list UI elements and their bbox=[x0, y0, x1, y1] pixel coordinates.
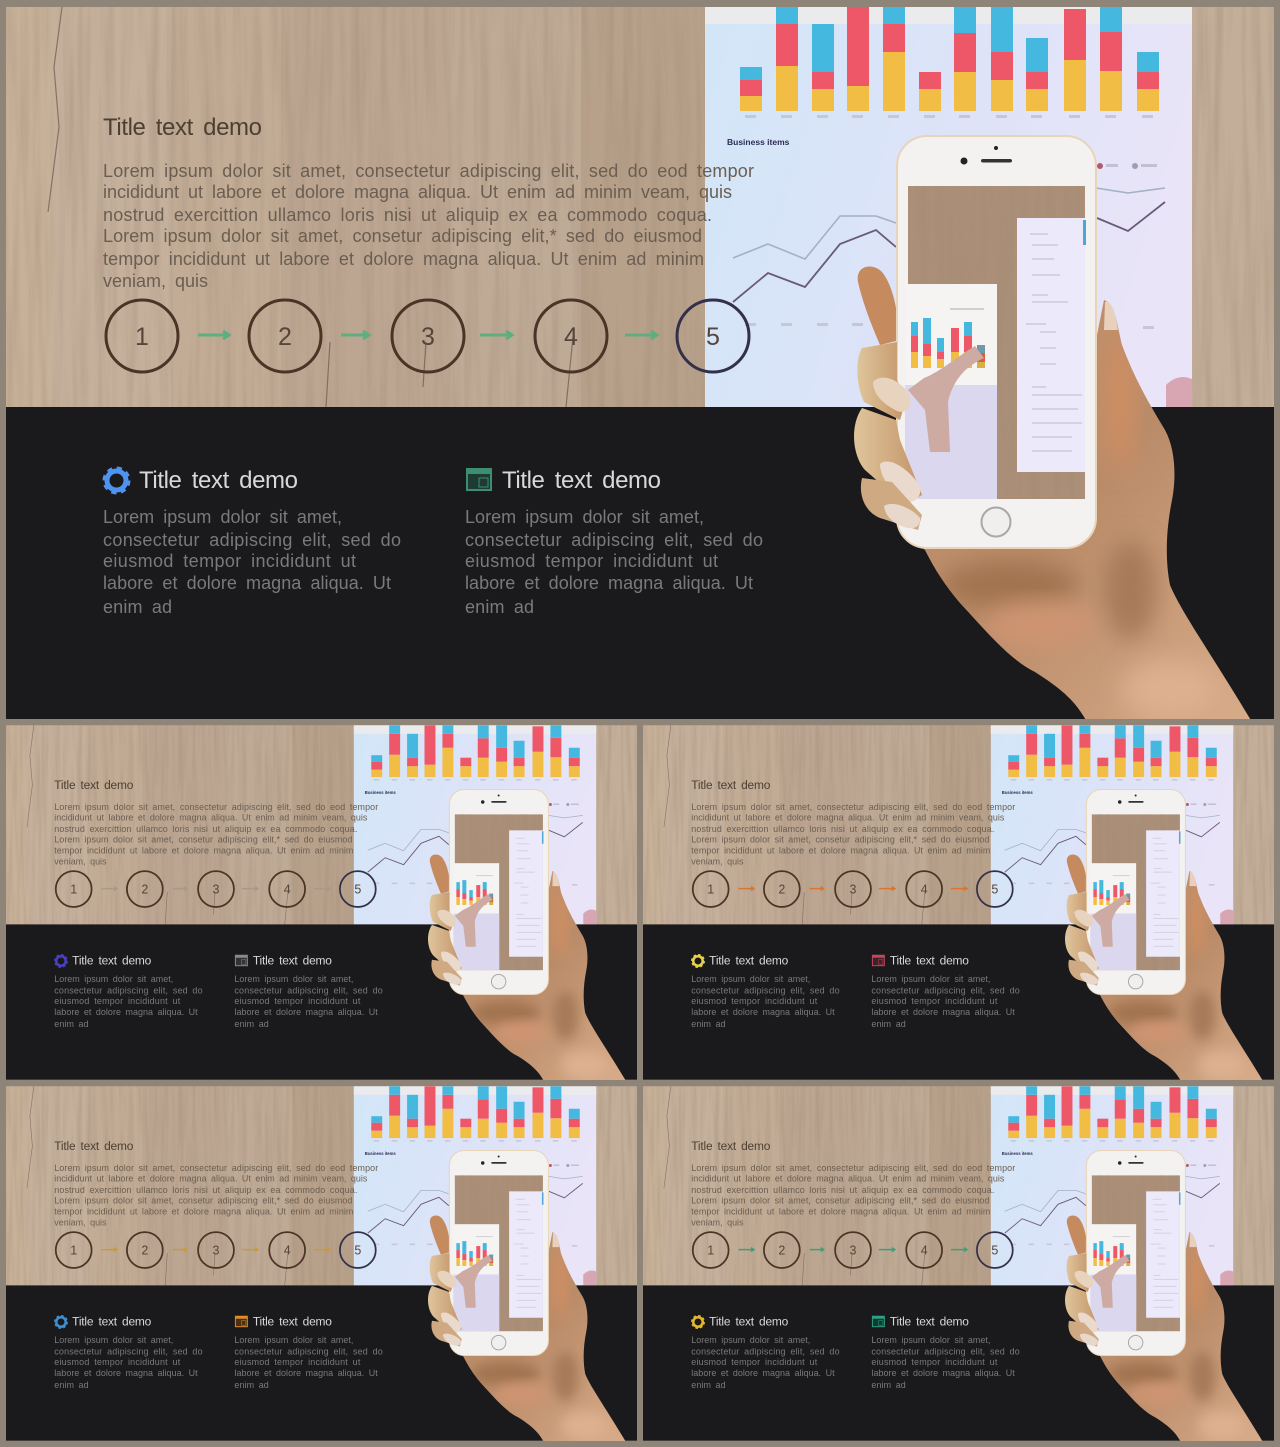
feature text 1: labore et dolore magna aliqua. Ut bbox=[54, 1007, 198, 1017]
text block: intro paragraph: Lorem ipsum dolor sit amet, consetur adipiscing elit,* sed do eiusmod bbox=[691, 1195, 989, 1205]
hand holding phone bbox=[428, 1151, 626, 1442]
feature text 1: Lorem ipsum dolor sit amet, bbox=[691, 974, 810, 984]
feature text 1: consectetur adipiscing elit, sed do bbox=[691, 1347, 840, 1357]
feature title 2: Title text demo bbox=[253, 1315, 332, 1329]
feature title 1: Title text demo bbox=[72, 1315, 152, 1329]
feature text 2: labore et dolore magna aliqua. Ut bbox=[465, 573, 753, 593]
text block: intro paragraph: tempor incididunt ut labore et dolore magna aliqua. Ut enim ad minim bbox=[54, 846, 353, 856]
icon: gear bbox=[55, 955, 67, 967]
feature text 2: labore et dolore magna aliqua. Ut bbox=[871, 1368, 1015, 1378]
numbered process steps: 2 bbox=[278, 323, 292, 351]
text block: intro paragraph: tempor incididunt ut labore et dolore magna aliqua. Ut enim ad minim bbox=[54, 1207, 353, 1217]
feature text 1: enim ad bbox=[691, 1019, 726, 1029]
numbered process steps: 5 bbox=[991, 883, 998, 897]
text block: intro paragraph: nostrud exercittion ullamco loris nisi ut aliquip ex ea commodo coqua. bbox=[691, 1185, 994, 1195]
numbered process steps bbox=[56, 1232, 376, 1268]
text block: intro paragraph: nostrud exercittion ullamco loris nisi ut aliquip ex ea commodo coqua. bbox=[54, 1185, 357, 1195]
heading: Title text demo bbox=[103, 114, 262, 141]
feature title 1: Title text demo bbox=[709, 1315, 789, 1329]
feature text 2: consectetur adipiscing elit, sed do bbox=[465, 530, 763, 550]
text block: intro paragraph: Lorem ipsum dolor sit amet, consetur adipiscing elit,* sed do eiusmod bbox=[54, 834, 352, 844]
panel: dark lower section bbox=[6, 407, 1274, 719]
feature text 1: consectetur adipiscing elit, sed do bbox=[103, 530, 401, 550]
feature title 1: Title text demo bbox=[72, 954, 152, 968]
icon: gear bbox=[692, 955, 704, 967]
feature title 2: Title text demo bbox=[890, 1315, 969, 1329]
hand holding phone bbox=[1065, 1151, 1263, 1442]
text block: intro paragraph bbox=[54, 1163, 378, 1228]
feature text 2: labore et dolore magna aliqua. Ut bbox=[234, 1368, 378, 1378]
feature text 1: eiusmod tempor incididunt ut bbox=[691, 1357, 818, 1367]
heading: Title text demo bbox=[54, 1139, 134, 1153]
feature text 1 bbox=[54, 1335, 203, 1390]
feature text 2 bbox=[871, 1335, 1020, 1390]
feature text 2: enim ad bbox=[465, 597, 534, 617]
icon: window bbox=[235, 1316, 247, 1327]
numbered process steps: 3 bbox=[850, 883, 857, 897]
feature text 2: eiusmod tempor incididunt ut bbox=[871, 1357, 998, 1367]
panel: dark lower section bbox=[6, 924, 637, 1080]
numbered process steps: 2 bbox=[778, 1244, 785, 1258]
feature text 2: eiusmod tempor incididunt ut bbox=[234, 996, 361, 1006]
text block: intro paragraph: nostrud exercittion ullamco loris nisi ut aliquip ex ea commodo coqua. bbox=[54, 824, 357, 834]
panel: main slide bbox=[6, 7, 1274, 719]
numbered process steps: 4 bbox=[284, 883, 291, 897]
text block: intro paragraph: incididunt ut labore et dolore magna aliqua. Ut enim ad minim veam, quis bbox=[691, 1173, 1005, 1183]
panel: variant slide top right bbox=[643, 725, 1274, 1080]
panel: variant slide bottom right bbox=[643, 1086, 1274, 1441]
feature text 2: labore et dolore magna aliqua. Ut bbox=[234, 1007, 378, 1017]
feature title 1: Title text demo bbox=[139, 467, 298, 494]
feature text 1: consectetur adipiscing elit, sed do bbox=[54, 1347, 203, 1357]
icon: window bbox=[872, 955, 884, 966]
icon: gear bbox=[104, 468, 128, 492]
text block: intro paragraph: veniam, quis bbox=[691, 857, 744, 867]
numbered process steps: 3 bbox=[850, 1244, 857, 1258]
feature text 1 bbox=[691, 1335, 840, 1390]
feature text 1 bbox=[54, 974, 203, 1029]
text block: intro paragraph bbox=[691, 1163, 1015, 1228]
numbered process steps: 4 bbox=[921, 1244, 928, 1258]
feature text 1 bbox=[103, 507, 401, 617]
feature text 2: Lorem ipsum dolor sit amet, bbox=[234, 1335, 353, 1345]
feature text 1: enim ad bbox=[54, 1380, 89, 1390]
numbered process steps: 5 bbox=[354, 883, 361, 897]
feature text 1: enim ad bbox=[691, 1380, 726, 1390]
text block: intro paragraph: veniam, quis bbox=[691, 1218, 744, 1228]
numbered process steps: 1 bbox=[70, 1244, 77, 1258]
text block: intro paragraph: veniam, quis bbox=[54, 857, 107, 867]
text block: intro paragraph: incididunt ut labore et dolore magna aliqua. Ut enim ad minim veam, quis bbox=[103, 182, 732, 202]
hand holding phone bbox=[854, 136, 1252, 722]
heading: Title text demo bbox=[691, 778, 771, 792]
feature text 2 bbox=[871, 974, 1020, 1029]
numbered process steps: 4 bbox=[564, 323, 578, 351]
text block: intro paragraph: veniam, quis bbox=[54, 1218, 107, 1228]
text block: intro paragraph: Lorem ipsum dolor sit amet, consectetur adipiscing elit, sed do eod tempor bbox=[103, 161, 754, 181]
text block: intro paragraph: Lorem ipsum dolor sit amet, consetur adipiscing elit,* sed do eiusmod bbox=[54, 1195, 352, 1205]
feature text 2 bbox=[465, 507, 763, 617]
feature text 2: Lorem ipsum dolor sit amet, bbox=[871, 974, 990, 984]
text block: intro paragraph: tempor incididunt ut labore et dolore magna aliqua. Ut enim ad minim bbox=[691, 1207, 990, 1217]
icon: window bbox=[467, 469, 491, 490]
feature text 1: consectetur adipiscing elit, sed do bbox=[691, 986, 840, 996]
feature text 2: consectetur adipiscing elit, sed do bbox=[871, 986, 1020, 996]
feature text 2: enim ad bbox=[234, 1019, 269, 1029]
heading: Title text demo bbox=[691, 1139, 771, 1153]
feature text 2: enim ad bbox=[871, 1019, 906, 1029]
text block: intro paragraph: tempor incididunt ut labore et dolore magna aliqua. Ut enim ad minim bbox=[103, 249, 704, 269]
icon: window bbox=[235, 955, 247, 966]
numbered process steps bbox=[693, 871, 1013, 907]
feature text 2: Lorem ipsum dolor sit amet, bbox=[465, 507, 704, 527]
numbered process steps: 1 bbox=[707, 883, 714, 897]
text block: intro paragraph bbox=[103, 161, 754, 291]
wood background and printed chart paper bbox=[643, 1086, 1274, 1285]
icon: gear bbox=[692, 1316, 704, 1328]
text block: intro paragraph: Lorem ipsum dolor sit amet, consectetur adipiscing elit, sed do eod tempor bbox=[54, 1163, 378, 1173]
feature text 1: Lorem ipsum dolor sit amet, bbox=[103, 507, 342, 527]
wood background and printed chart paper bbox=[6, 1086, 637, 1285]
feature text 1: Lorem ipsum dolor sit amet, bbox=[691, 1335, 810, 1345]
numbered process steps: 3 bbox=[213, 883, 220, 897]
feature text 2: Lorem ipsum dolor sit amet, bbox=[234, 974, 353, 984]
feature text 1: Lorem ipsum dolor sit amet, bbox=[54, 974, 173, 984]
text block: intro paragraph: nostrud exercittion ullamco loris nisi ut aliquip ex ea commodo coqua. bbox=[691, 824, 994, 834]
numbered process steps bbox=[693, 1232, 1013, 1268]
wood background and printed chart paper bbox=[6, 7, 1274, 407]
text block: intro paragraph: Lorem ipsum dolor sit amet, consectetur adipiscing elit, sed do eod tempor bbox=[691, 802, 1015, 812]
feature text 2: eiusmod tempor incididunt ut bbox=[871, 996, 998, 1006]
numbered process steps: 1 bbox=[707, 1244, 714, 1258]
feature text 1: consectetur adipiscing elit, sed do bbox=[54, 986, 203, 996]
numbered process steps: 2 bbox=[141, 1244, 148, 1258]
numbered process steps: 5 bbox=[354, 1244, 361, 1258]
feature text 1: labore et dolore magna aliqua. Ut bbox=[691, 1007, 835, 1017]
feature text 2 bbox=[234, 1335, 383, 1390]
numbered process steps: 2 bbox=[141, 883, 148, 897]
feature text 1 bbox=[691, 974, 840, 1029]
feature text 1: eiusmod tempor incididunt ut bbox=[54, 1357, 181, 1367]
text block: intro paragraph bbox=[54, 802, 378, 867]
icon: gear bbox=[55, 1316, 67, 1328]
numbered process steps bbox=[106, 300, 749, 372]
text block: intro paragraph: nostrud exercittion ullamco loris nisi ut aliquip ex ea commodo coqua. bbox=[103, 205, 712, 225]
numbered process steps: 1 bbox=[135, 323, 149, 351]
text block: intro paragraph: Lorem ipsum dolor sit amet, consectetur adipiscing elit, sed do eod tempor bbox=[691, 1163, 1015, 1173]
feature text 1: eiusmod tempor incididunt ut bbox=[54, 996, 181, 1006]
feature text 2: consectetur adipiscing elit, sed do bbox=[234, 1347, 383, 1357]
text block: intro paragraph: incididunt ut labore et dolore magna aliqua. Ut enim ad minim veam, quis bbox=[54, 1173, 368, 1183]
panel: dark lower section bbox=[6, 1285, 637, 1441]
feature text 1: labore et dolore magna aliqua. Ut bbox=[691, 1368, 835, 1378]
feature text 1: labore et dolore magna aliqua. Ut bbox=[103, 573, 391, 593]
numbered process steps: 5 bbox=[706, 323, 720, 351]
panel: dark lower section bbox=[643, 1285, 1274, 1441]
feature text 2: eiusmod tempor incididunt ut bbox=[234, 1357, 361, 1367]
text block: intro paragraph: incididunt ut labore et dolore magna aliqua. Ut enim ad minim veam, quis bbox=[54, 812, 368, 822]
feature text 1: eiusmod tempor incididunt ut bbox=[103, 551, 356, 571]
feature text 2: consectetur adipiscing elit, sed do bbox=[234, 986, 383, 996]
feature text 2: Lorem ipsum dolor sit amet, bbox=[871, 1335, 990, 1345]
feature text 1: eiusmod tempor incididunt ut bbox=[691, 996, 818, 1006]
feature title 2: Title text demo bbox=[890, 954, 969, 968]
icon: window bbox=[872, 1316, 884, 1327]
feature title 1: Title text demo bbox=[709, 954, 789, 968]
heading: Title text demo bbox=[54, 778, 134, 792]
text block: intro paragraph bbox=[691, 802, 1015, 867]
feature text 2: consectetur adipiscing elit, sed do bbox=[871, 1347, 1020, 1357]
numbered process steps bbox=[56, 871, 376, 907]
feature text 2: labore et dolore magna aliqua. Ut bbox=[871, 1007, 1015, 1017]
feature title 2: Title text demo bbox=[502, 467, 661, 494]
wood background and printed chart paper bbox=[6, 725, 637, 924]
feature text 1: enim ad bbox=[54, 1019, 89, 1029]
numbered process steps: 4 bbox=[284, 1244, 291, 1258]
numbered process steps: 5 bbox=[991, 1244, 998, 1258]
feature text 2 bbox=[234, 974, 383, 1029]
panel: variant slide top left bbox=[6, 725, 637, 1080]
hand holding phone bbox=[428, 790, 626, 1081]
text block: intro paragraph: veniam, quis bbox=[103, 271, 208, 291]
text block: intro paragraph: Lorem ipsum dolor sit amet, consetur adipiscing elit,* sed do eiusmod bbox=[691, 834, 989, 844]
feature text 2: eiusmod tempor incididunt ut bbox=[465, 551, 718, 571]
text block: intro paragraph: Lorem ipsum dolor sit amet, consetur adipiscing elit,* sed do eiusmod bbox=[103, 226, 702, 246]
feature text 2: enim ad bbox=[234, 1380, 269, 1390]
feature text 1: enim ad bbox=[103, 597, 172, 617]
numbered process steps: 4 bbox=[921, 883, 928, 897]
hand holding phone bbox=[1065, 790, 1263, 1081]
numbered process steps: 3 bbox=[421, 323, 435, 351]
feature text 2: enim ad bbox=[871, 1380, 906, 1390]
text block: intro paragraph: incididunt ut labore et dolore magna aliqua. Ut enim ad minim veam, quis bbox=[691, 812, 1005, 822]
numbered process steps: 2 bbox=[778, 883, 785, 897]
feature text 1: Lorem ipsum dolor sit amet, bbox=[54, 1335, 173, 1345]
text block: intro paragraph: Lorem ipsum dolor sit amet, consectetur adipiscing elit, sed do eod tempor bbox=[54, 802, 378, 812]
text block: intro paragraph: tempor incididunt ut labore et dolore magna aliqua. Ut enim ad minim bbox=[691, 846, 990, 856]
numbered process steps: 3 bbox=[213, 1244, 220, 1258]
panel: variant slide bottom left bbox=[6, 1086, 637, 1441]
wood background and printed chart paper bbox=[643, 725, 1274, 924]
numbered process steps: 1 bbox=[70, 883, 77, 897]
feature title 2: Title text demo bbox=[253, 954, 332, 968]
panel: dark lower section bbox=[643, 924, 1274, 1080]
feature text 1: labore et dolore magna aliqua. Ut bbox=[54, 1368, 198, 1378]
